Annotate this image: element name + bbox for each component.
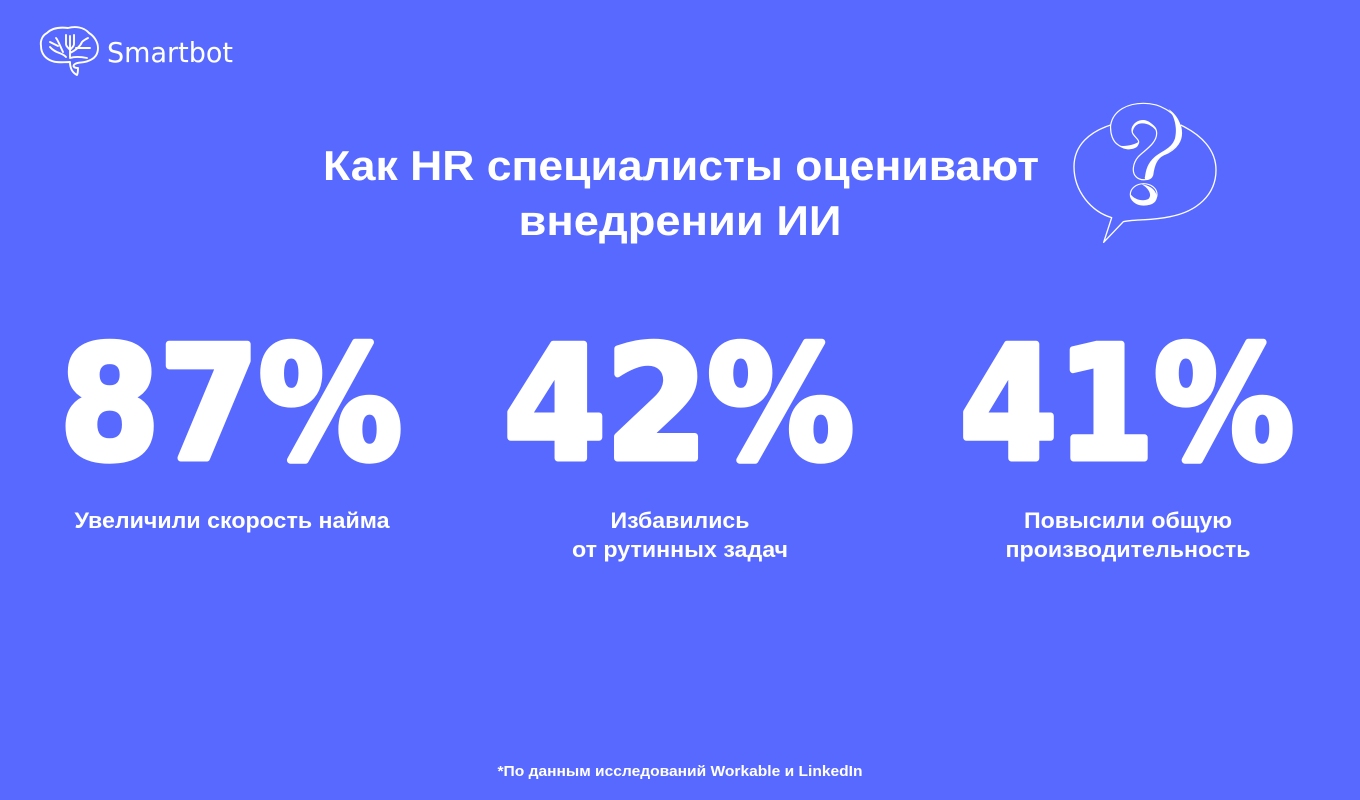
stat: 41%: 41% [960, 313, 1294, 495]
caption: 41% [1006, 508, 1250, 562]
footnote: source: *По данным исследований Workable и LinkedIn [498, 763, 862, 780]
caption: 87%: Увеличили скорость найма [74, 508, 390, 533]
icon: brain [41, 27, 98, 75]
logo: Smartbot [41, 27, 233, 75]
caption: 42%: от рутинных задач [572, 537, 788, 562]
title [323, 142, 1039, 244]
stat: 42% [504, 313, 854, 562]
caption: 41%: Повысили общую [1024, 508, 1232, 533]
caption: 41%: производительность [1006, 537, 1250, 562]
caption: 42% [572, 508, 788, 562]
stat: 87%: 87% [60, 313, 402, 495]
caption: 42%: Избавились [610, 508, 750, 533]
stat: 41% [960, 313, 1294, 562]
stat: 42%: 42% [504, 313, 854, 495]
icon: speech bubble with question mark [1074, 103, 1216, 242]
logo wordmark: Smartbot [107, 36, 233, 69]
title: Как HR специалисты оценивают [323, 142, 1039, 189]
title: внедрении ИИ [518, 197, 842, 244]
